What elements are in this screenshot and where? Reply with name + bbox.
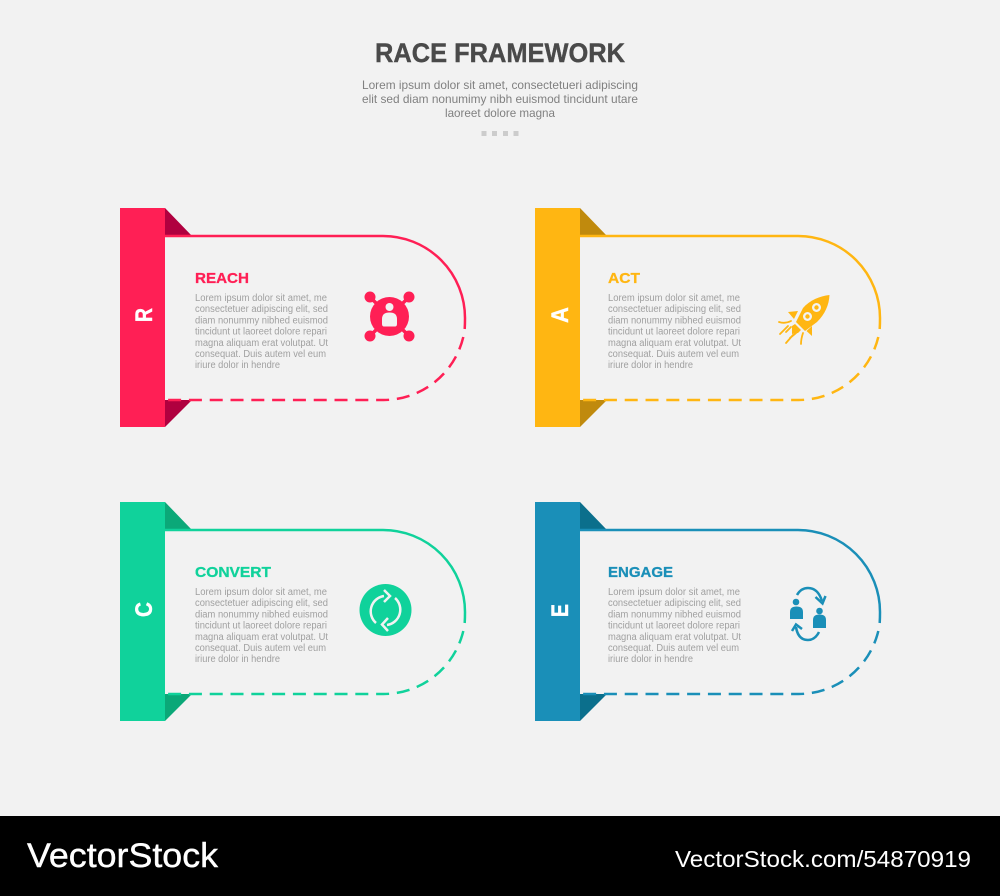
body text: iriure dolor in hendre (608, 360, 694, 371)
subtitle text: elit sed diam nonumimy nibh euismod tincidunt utare (362, 92, 638, 106)
body text: Lorem ipsum dolor sit amet, me (608, 587, 741, 598)
body text: consectetuer adipiscing elit, sed (195, 304, 328, 315)
body text: tincidunt ut laoreet dolore repari (608, 327, 740, 338)
icon: rocket (779, 295, 830, 344)
outline (580, 236, 880, 400)
body text: consequat. Duis autem vel eum (195, 349, 326, 360)
body text: consequat. Duis autem vel eum (195, 643, 326, 654)
footer bar (0, 816, 1000, 896)
body text: iriure dolor in hendre (608, 654, 694, 665)
body text: tincidunt ut laoreet dolore repari (608, 621, 740, 632)
body text: consectetuer adipiscing elit, sed (195, 598, 328, 609)
heading: REACH (195, 270, 249, 287)
body text: magna aliquam erat volutpat. Ut (195, 338, 328, 349)
letter tab: E (547, 604, 574, 617)
folded corners (580, 208, 607, 427)
icon: network person (364, 292, 414, 342)
heading: CONVERT (195, 564, 271, 581)
body text: Lorem ipsum dolor sit amet, me (608, 293, 741, 304)
body text: tincidunt ut laoreet dolore repari (195, 621, 327, 632)
body text: consequat. Duis autem vel eum (608, 643, 739, 654)
letter tab: A (547, 307, 574, 323)
body text: magna aliquam erat volutpat. Ut (608, 632, 741, 643)
title: RACE FRAMEWORK (375, 38, 625, 68)
folded corners (165, 502, 192, 721)
body text: diam nonummy nibhed euismod (195, 315, 328, 326)
body text: iriure dolor in hendre (195, 654, 281, 665)
icon: people exchange (790, 588, 826, 640)
heading: ENGAGE (608, 564, 673, 581)
letter tab: R (131, 308, 158, 322)
letter tab (535, 208, 580, 427)
title dots (482, 131, 518, 136)
body text: magna aliquam erat volutpat. Ut (195, 632, 328, 643)
body text: diam nonummy nibhed euismod (608, 609, 741, 620)
outline (165, 236, 465, 400)
heading: ACT (608, 270, 640, 287)
outline (165, 530, 465, 694)
letter tab (120, 502, 165, 721)
subtitle text: Lorem ipsum dolor sit amet, consectetueri adipiscing (362, 78, 638, 92)
folded corners (165, 208, 192, 427)
body text: consectetuer adipiscing elit, sed (608, 304, 741, 315)
body text: magna aliquam erat volutpat. Ut (608, 338, 741, 349)
folded corners (580, 502, 607, 721)
letter tab: C (131, 602, 158, 617)
body text: tincidunt ut laoreet dolore repari (195, 327, 327, 338)
body text: diam nonummy nibhed euismod (608, 315, 741, 326)
body text (195, 587, 328, 665)
outline (580, 530, 880, 694)
footer image id: VectorStock.com/54870919 (675, 846, 971, 872)
body text: diam nonummy nibhed euismod (195, 609, 328, 620)
subtitle text: laoreet dolore magna (445, 106, 555, 120)
letter tab (120, 208, 165, 427)
body text (608, 293, 741, 371)
panel: reach (120, 208, 465, 427)
subtitle text (362, 78, 638, 120)
panel: convert (120, 502, 465, 721)
body text: consectetuer adipiscing elit, sed (608, 598, 741, 609)
body text: Lorem ipsum dolor sit amet, me (195, 587, 328, 598)
body text: consequat. Duis autem vel eum (608, 349, 739, 360)
footer logo: VectorStock (27, 837, 219, 875)
body text: Lorem ipsum dolor sit amet, me (195, 293, 328, 304)
body text (608, 587, 741, 665)
panel: engage (535, 502, 880, 721)
body text (195, 293, 328, 371)
icon: refresh cycle (360, 584, 412, 636)
letter tab (535, 502, 580, 721)
panel: act (535, 208, 880, 427)
body text: iriure dolor in hendre (195, 360, 281, 371)
